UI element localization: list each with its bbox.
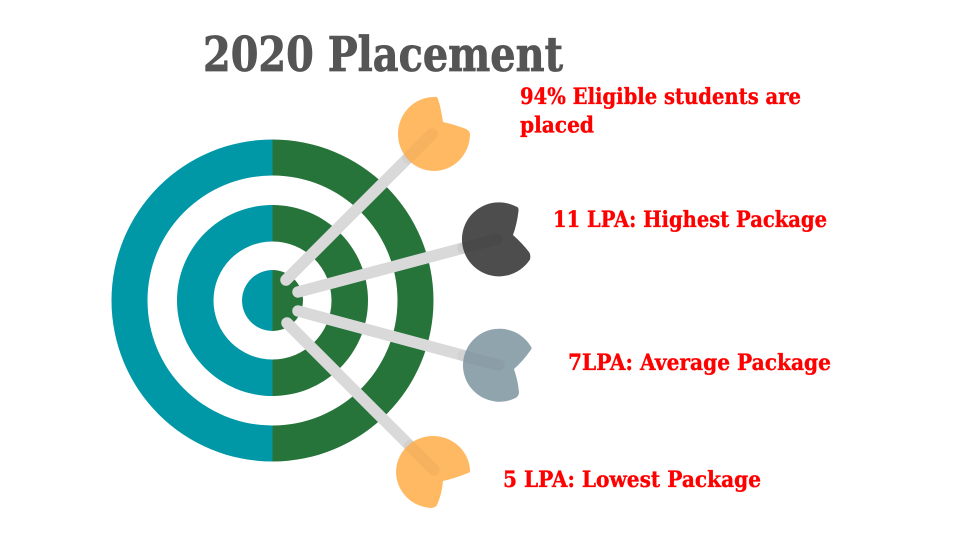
chart: target [112, 140, 434, 462]
label: eligible students placed [520, 84, 801, 138]
dart: dark grey [298, 202, 530, 292]
dart: top orange [286, 97, 470, 280]
dart: blue grey [298, 311, 532, 402]
label: highest package: 11 LPA: Highest Package [553, 207, 827, 233]
label: lowest package: 5 LPA: Lowest Package [503, 467, 761, 493]
label: eligible students placed: 94% Eligible students are [520, 84, 801, 110]
dart: bottom orange [287, 323, 470, 508]
title: 2020 Placement [203, 27, 563, 83]
label: eligible students placed: placed [520, 112, 594, 138]
label: average package: 7LPA: Average Package [568, 350, 831, 376]
